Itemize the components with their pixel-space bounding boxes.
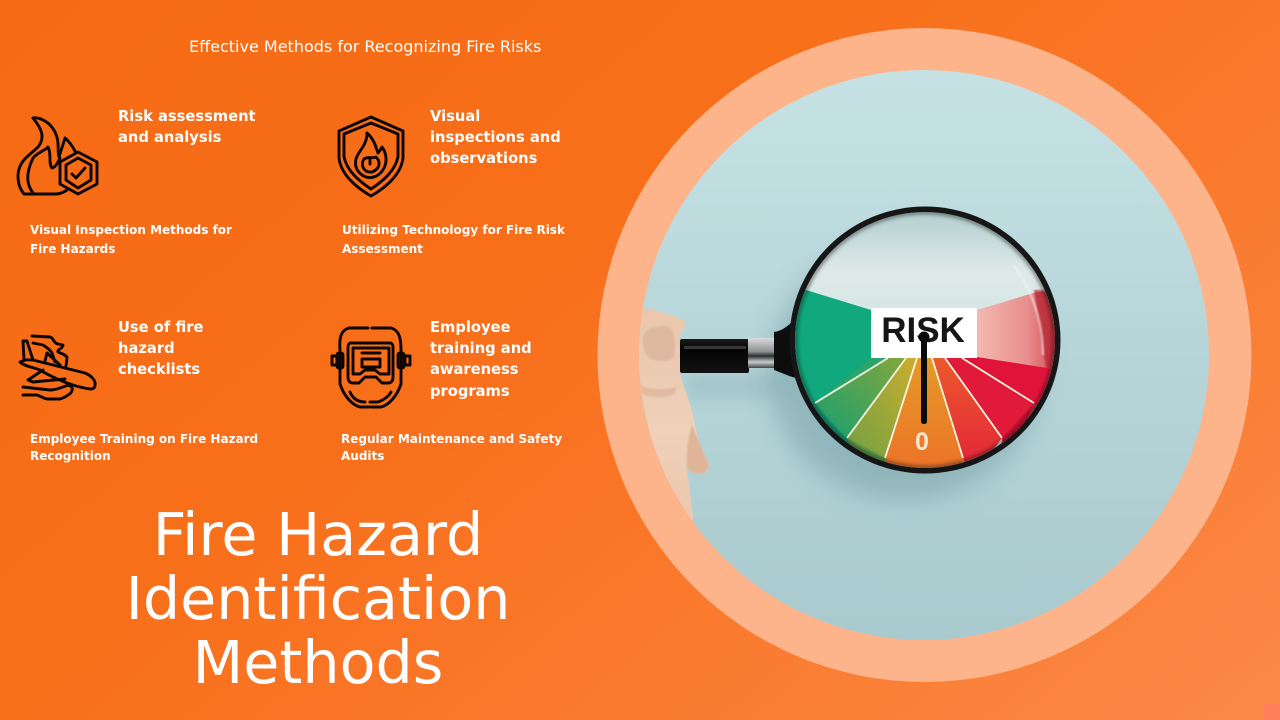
handle shadow bbox=[685, 376, 790, 396]
gauge wedges bbox=[815, 358, 906, 438]
heading: employee training: awareness bbox=[430, 361, 518, 378]
hand bbox=[639, 308, 710, 522]
icon: flame with shield bbox=[18, 118, 97, 194]
heading: employee training: Employee bbox=[430, 319, 510, 336]
text: regular maintenance bbox=[341, 432, 562, 463]
heading: checklists: hazard bbox=[118, 340, 175, 357]
text: employee training on recognition: Recognition bbox=[30, 449, 111, 463]
title: Identification bbox=[126, 565, 510, 633]
gauge zero: 0 bbox=[915, 428, 929, 456]
heading: visual inspections: inspections and bbox=[430, 129, 561, 146]
text: utilizing technology bbox=[342, 223, 566, 256]
title: Methods bbox=[193, 629, 443, 697]
subtitle: Effective Methods for Recognizing Fire Risks bbox=[189, 37, 541, 56]
photo bbox=[630, 60, 1220, 650]
finger tip shade bbox=[687, 425, 709, 474]
title bbox=[126, 501, 510, 697]
gauge dividers bbox=[815, 358, 1034, 458]
text: utilizing technology: Utilizing Technology for Fire Risk bbox=[342, 223, 565, 237]
text: visual inspection methods bbox=[30, 223, 232, 256]
risk label bbox=[871, 308, 977, 358]
knuckle crease bbox=[640, 385, 676, 397]
text: regular maintenance: Regular Maintenance and Safety bbox=[341, 432, 562, 446]
heading: visual inspections: Visual bbox=[430, 108, 480, 125]
ring bbox=[598, 28, 1252, 682]
magnifying glass lens bbox=[780, 205, 1060, 480]
title: Fire Hazard bbox=[153, 501, 483, 569]
heading: checklists bbox=[118, 319, 203, 378]
text: employee training on recognition bbox=[30, 432, 258, 463]
text: utilizing technology: Assessment bbox=[342, 242, 423, 256]
green wedge bbox=[795, 290, 871, 404]
heading: visual inspections: observations bbox=[430, 150, 537, 167]
heading: employee training: programs bbox=[430, 383, 510, 400]
glare bbox=[1013, 265, 1043, 355]
heading: employee training: training and bbox=[430, 340, 532, 357]
heading: checklists: checklists bbox=[118, 361, 200, 378]
heading: checklists: Use of fire bbox=[118, 319, 203, 336]
heading: employee training bbox=[430, 319, 532, 400]
icon: shield with flame bbox=[339, 117, 403, 196]
icon: airplane on fire bbox=[20, 336, 95, 399]
thumbnail bbox=[643, 326, 675, 361]
handle bbox=[680, 320, 796, 378]
text: visual inspection methods: Visual Inspection Methods for bbox=[30, 223, 232, 237]
text: visual inspection methods: Fire Hazards bbox=[30, 242, 115, 256]
heading: risk assessment bbox=[118, 108, 256, 146]
text: regular maintenance: Audits bbox=[341, 449, 384, 463]
lens edge shade bbox=[794, 211, 1056, 469]
heading: risk assessment: Risk assessment bbox=[118, 108, 256, 125]
lens shadow bbox=[769, 244, 1041, 500]
heading: visual inspections bbox=[430, 108, 561, 167]
text: employee training on recognition: Employee Training on Fire Hazard bbox=[30, 432, 258, 446]
heading: risk assessment: and analysis bbox=[118, 129, 221, 146]
right pink wedge bbox=[977, 292, 1060, 370]
icon: welding mask bbox=[332, 328, 410, 407]
risk label: RISK bbox=[881, 311, 965, 350]
gauge needle bbox=[918, 332, 930, 424]
